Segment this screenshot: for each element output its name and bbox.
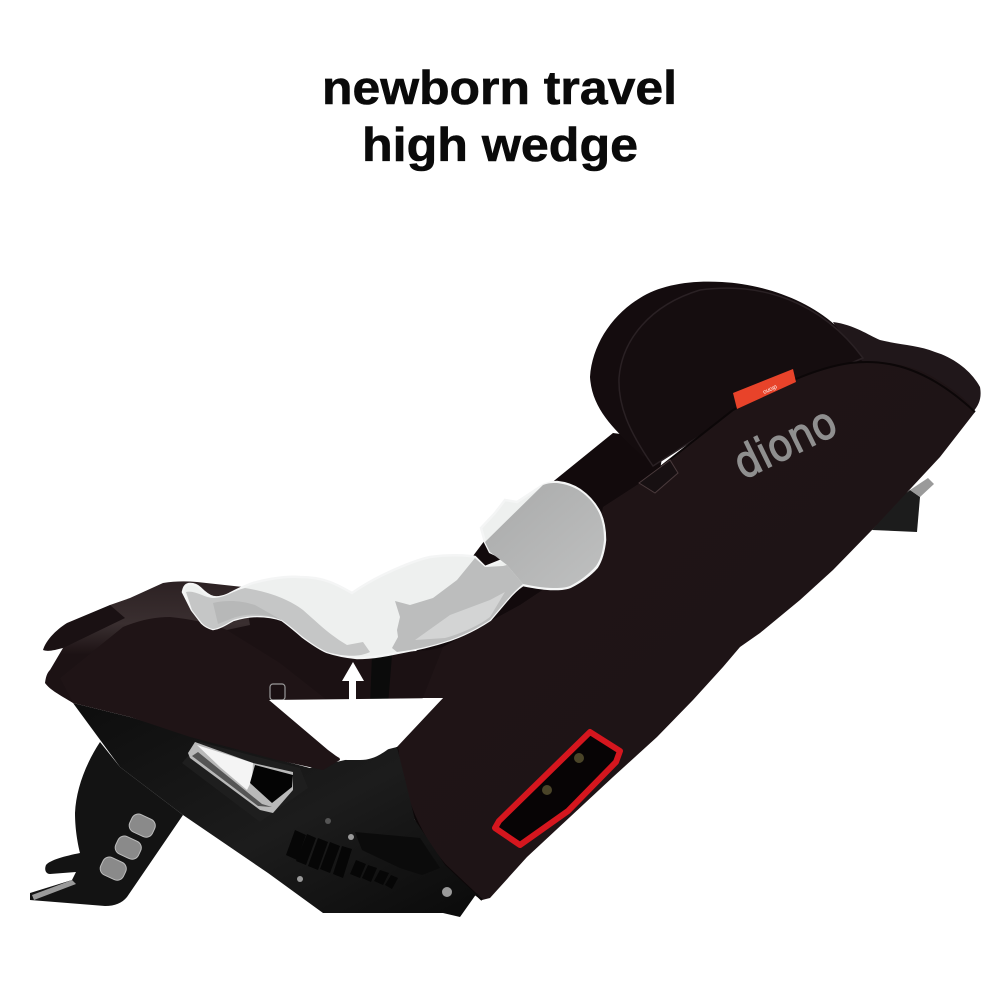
belt buckle strap — [370, 655, 392, 705]
diono logo: diono — [725, 397, 845, 490]
leg rest tab — [43, 605, 125, 651]
red belt path loop — [495, 732, 620, 845]
title — [322, 61, 677, 171]
seat shell behind baby — [400, 433, 665, 700]
screws — [297, 818, 452, 897]
seat pad — [205, 615, 443, 705]
base frame — [73, 703, 482, 917]
base side plate — [355, 832, 440, 875]
seat seen through baby — [485, 483, 604, 588]
leg adjustment buttons — [98, 812, 158, 883]
white wedge cut-out — [269, 698, 443, 760]
up arrow — [342, 662, 364, 703]
title: high wedge — [362, 118, 638, 171]
front leg — [30, 742, 183, 906]
title: newborn travel — [322, 61, 677, 114]
main side panel — [397, 362, 975, 900]
chrome recline handle — [188, 742, 293, 813]
side vents — [286, 830, 398, 889]
rear base foot — [872, 478, 934, 532]
lower anchor tag — [270, 684, 285, 700]
leg rest side panel — [60, 617, 340, 770]
leg rest cushion — [45, 581, 250, 703]
safety label — [639, 460, 678, 493]
baby silhouette — [183, 482, 605, 658]
red tag: diono — [761, 383, 778, 395]
red tag — [733, 369, 796, 409]
headrest — [590, 282, 863, 466]
car seat — [30, 282, 981, 917]
rear seat back top — [833, 322, 981, 412]
